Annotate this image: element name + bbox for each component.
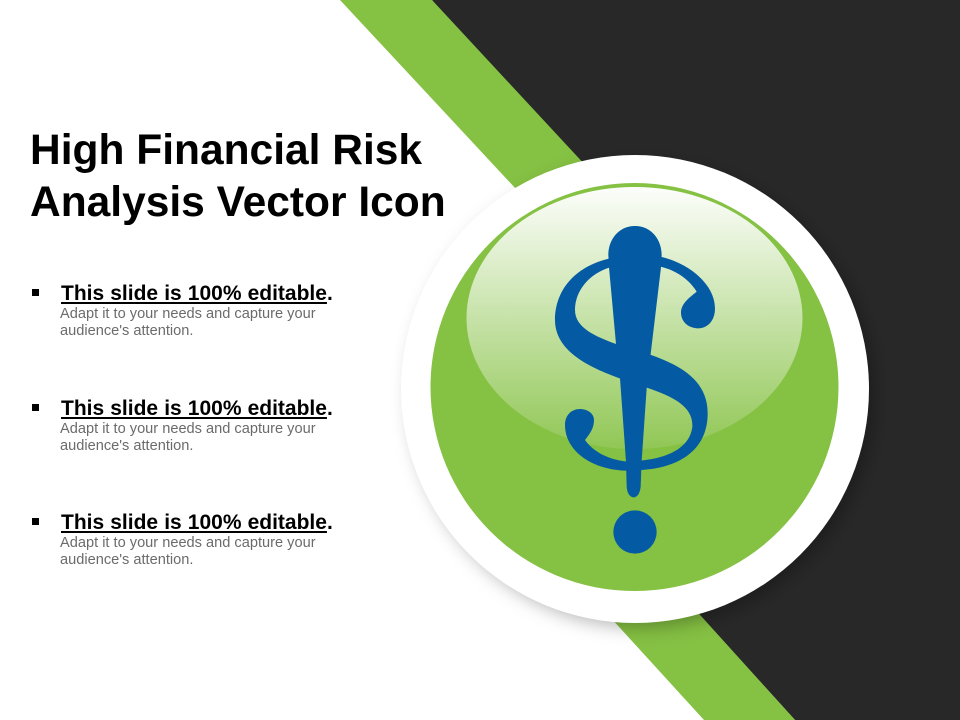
green diagonal band top [340, 0, 600, 204]
title: High Financial Risk [30, 127, 422, 174]
bullet item 1: This slide is 100% editable. [61, 282, 333, 305]
gloss highlight [466, 187, 802, 449]
bullet item 1: Adapt it to your needs and capture your [60, 306, 316, 322]
bullet item 3: audience's attention. [60, 552, 193, 568]
white circle [401, 155, 869, 623]
title [30, 127, 446, 226]
green circle [430, 183, 838, 591]
bullet item 3: This slide is 100% editable. [61, 511, 333, 534]
bullet item 2: audience's attention. [60, 438, 193, 454]
circle shadow [410, 163, 874, 627]
exclamation dot [613, 510, 657, 554]
bullet item 2 [32, 397, 333, 454]
bullet item 3: Adapt it to your needs and capture your [60, 535, 316, 551]
bullet item 2: Adapt it to your needs and capture your [60, 421, 316, 437]
dark panel [432, 0, 960, 720]
green diagonal band bottom [600, 606, 795, 720]
exclamation stem [608, 226, 662, 497]
bullet item 3 [32, 511, 333, 568]
icon: dollar exclamation [555, 226, 715, 554]
dollar S curve [555, 257, 715, 471]
bullet item 1 [32, 282, 333, 339]
bullet item 1: audience's attention. [60, 323, 193, 339]
bullet item 2: This slide is 100% editable. [61, 397, 333, 420]
title: Analysis Vector Icon [30, 179, 446, 226]
